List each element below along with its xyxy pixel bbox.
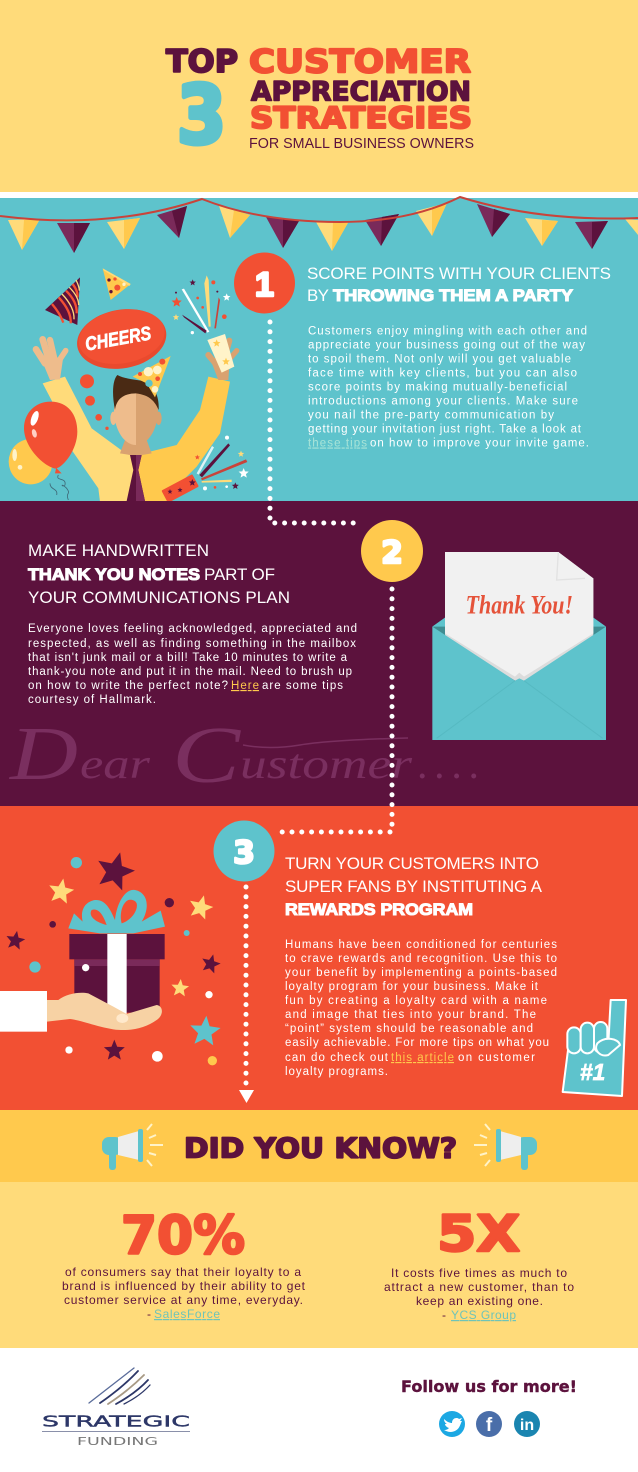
body text 2: Here	[231, 680, 259, 692]
stat text right: keep an existing one.	[416, 1294, 543, 1308]
step badge 2: 2	[381, 535, 403, 571]
icon: linkedin: in	[520, 1417, 534, 1434]
stat text right: It costs five times as much to	[391, 1266, 567, 1280]
yellow balloon	[9, 439, 53, 484]
illustration: envelope with thank you card	[432, 552, 606, 740]
body text 3: Humans have been conditioned for centuries	[285, 939, 557, 951]
title: top: TOP	[166, 44, 238, 80]
hand and sleeve	[0, 991, 162, 1032]
stat text right	[384, 1266, 574, 1322]
confetti stars	[5, 847, 222, 1060]
stat: 70 percent: 70%	[121, 1206, 245, 1266]
heading 2	[28, 541, 290, 607]
body text 1: getting your invitation just right. Take a look at	[308, 424, 582, 436]
stat: 5X: 5X	[437, 1205, 520, 1263]
icon: foam finger #1	[563, 1000, 626, 1096]
step badge 1: 1	[255, 266, 274, 304]
body text 3: on customer	[458, 1052, 535, 1064]
body text 3	[285, 939, 557, 1078]
body text 1: appreciate your business going out of the way	[308, 340, 585, 352]
stat text right: YCS Group	[451, 1308, 516, 1322]
body text 3: to crave rewards and recognition. Use this to	[285, 953, 557, 965]
logo: strategic funding	[42, 1368, 190, 1448]
man body	[43, 356, 230, 502]
body text 1: on how to improve your invite game.	[370, 438, 589, 450]
title: large numeral 3: 3	[177, 69, 226, 162]
watermark script text: ....	[418, 742, 480, 788]
logo: strategic funding: FUNDING	[77, 1435, 158, 1448]
body text 3: fun by creating a loyalty card with a name	[285, 995, 547, 1007]
title: appreciation: APPRECIATION	[251, 76, 471, 108]
body text 3: loyalty programs.	[285, 1066, 388, 1078]
panel: title header	[0, 0, 638, 192]
heading 2: MAKE HANDWRITTEN	[28, 541, 209, 560]
confetti dots	[29, 857, 217, 1065]
body text 1: score points by making mutually-beneficial	[308, 382, 567, 394]
icon: facebook: f	[486, 1415, 493, 1436]
footer	[0, 1348, 638, 1472]
stat text right: attract a new customer, than to	[384, 1280, 574, 1294]
watermark script text: ustomer	[240, 742, 413, 788]
body text 2: are some tips	[262, 680, 343, 692]
stat text left: of consumers say that their loyalty to a	[65, 1265, 301, 1279]
body text 2: on how to write the perfect note?	[28, 680, 228, 692]
step badge 3	[214, 820, 274, 882]
logo: strategic funding: STRATEGIC	[42, 1412, 190, 1430]
illustration: man celebrating	[9, 268, 249, 503]
title: strategies: STRATEGIES	[250, 101, 472, 135]
heading 3	[285, 854, 543, 919]
stat text left: brand is influenced by their ability to get	[62, 1279, 306, 1293]
gift box	[68, 890, 165, 1014]
thank you script: Thank You!	[466, 589, 573, 619]
body text 3: can do check out	[285, 1052, 389, 1064]
body text 3: this article	[391, 1052, 454, 1064]
body text 2: respected, as well as finding something in the mailbox	[28, 638, 356, 650]
body text 1: to spoil them. Not only will you get valuable	[308, 354, 571, 366]
stat text left	[62, 1265, 306, 1321]
subtitle: FOR SMALL BUSINESS OWNERS	[249, 135, 474, 152]
heading 2: THANK YOU NOTES	[28, 566, 200, 584]
stat text left: SalesForce	[154, 1307, 220, 1321]
body text 2: courtesy of Hallmark.	[28, 694, 156, 706]
heading 3: SUPER FANS BY INSTITUTING A	[285, 877, 543, 896]
stat text left: customer service at any time, everyday.	[64, 1293, 303, 1307]
title: customer: CUSTOMER	[249, 42, 471, 80]
watermark script text: D	[9, 712, 78, 796]
illustration: gift on hand	[0, 847, 222, 1065]
body text 1: you nail the pre-party communication by	[308, 410, 554, 422]
body text 1: face time with key clients, but you can also	[308, 368, 577, 380]
panel: section 3 rewards program	[0, 806, 638, 1110]
panel: section 2 thank you notes	[0, 501, 638, 806]
heading 3: REWARDS PROGRAM	[285, 901, 473, 919]
body text 1	[308, 326, 589, 450]
step badge 3: 3	[233, 835, 255, 871]
party cracker bottom	[161, 436, 249, 503]
raised hands	[36, 339, 237, 380]
body text 3: loyalty program for your business. Make it	[285, 981, 539, 993]
body text 3: and image that ties into your brand. The	[285, 1009, 536, 1021]
cheers speech bubble: CHEERS	[84, 323, 153, 356]
bunting garland	[0, 197, 638, 253]
body text 3: easily achievable. For more tips on what you	[285, 1037, 549, 1049]
icon: twitter	[439, 1411, 465, 1437]
red dots	[80, 374, 109, 430]
body text 2: that isn't junk mail or a bill! Take 10 minutes to write a	[28, 652, 348, 664]
step badge 1	[234, 252, 295, 314]
heading 1: SCORE POINTS WITH YOUR CLIENTS	[307, 264, 611, 283]
icon: megaphone right	[474, 1124, 537, 1170]
follow us heading: Follow us for more!	[401, 1377, 577, 1396]
body text 1: introductions among your clients. Make sure	[308, 396, 578, 408]
party popper top	[172, 275, 234, 373]
heading 1: BY	[307, 286, 329, 305]
heading 2: YOUR COMMUNICATIONS PLAN	[28, 588, 290, 607]
striped party hat	[45, 277, 80, 325]
heading 1	[307, 264, 611, 305]
heading 2: PART OF	[204, 565, 275, 584]
watermark script text: C	[172, 712, 242, 800]
arrow head	[239, 1090, 254, 1103]
heading 1: THROWING THEM A PARTY	[333, 287, 573, 305]
cheers speech bubble	[72, 302, 171, 376]
icon: foam finger #1: #1	[580, 1059, 605, 1085]
heading 3: TURN YOUR CUSTOMERS INTO	[285, 854, 539, 873]
watermark script text	[9, 712, 480, 800]
icon: linkedin	[514, 1411, 540, 1437]
watermark script text: ear	[80, 742, 151, 788]
body text 3: “point” system should be reasonable and	[285, 1023, 533, 1035]
red balloon	[24, 402, 77, 500]
stat text left: -	[147, 1307, 151, 1321]
stat text right: -	[442, 1308, 446, 1322]
icon: megaphone left	[102, 1124, 163, 1170]
body text 3: your benefit by implementing a points-based	[285, 967, 557, 979]
body text 2: Everyone loves feeling acknowledged, appreciated and	[28, 623, 357, 635]
panel: statistics	[0, 1182, 638, 1348]
body text 1: Customers enjoy mingling with each other and	[308, 326, 587, 338]
body text 1: these tips	[308, 438, 367, 450]
panel: section 1 party	[0, 197, 638, 503]
body text 2: thank-you note and put it in the mail. Need to brush up	[28, 666, 352, 678]
banner: did you know	[0, 1110, 638, 1182]
icon: facebook	[476, 1411, 502, 1437]
pizza slice hat	[103, 268, 131, 300]
body text 2	[28, 623, 357, 706]
dotted connector lines	[246, 322, 392, 1086]
step badge 2	[361, 520, 423, 582]
heading: did you know: DID YOU KNOW?	[184, 1132, 457, 1164]
